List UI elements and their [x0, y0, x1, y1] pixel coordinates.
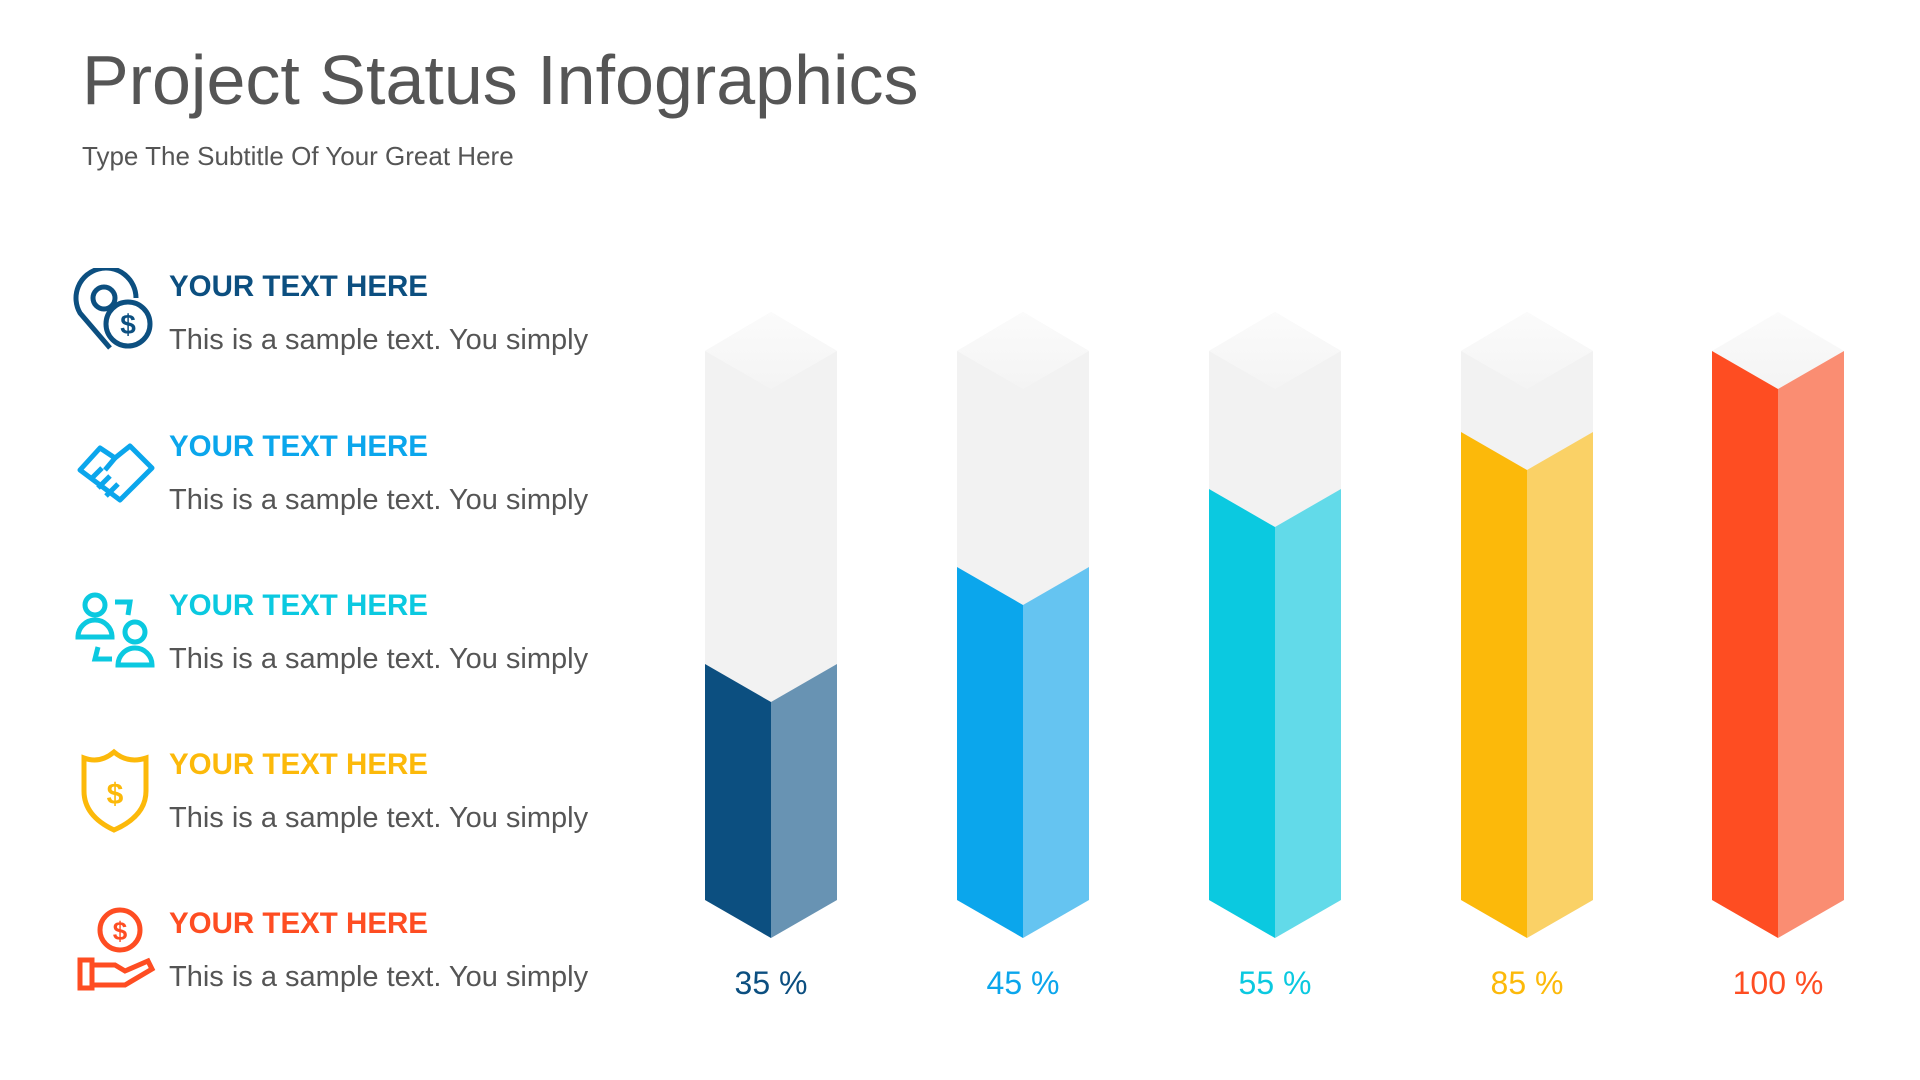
bar 100%: 100 % [1733, 965, 1823, 1001]
title: Project Status Infographics [82, 41, 919, 119]
row 5 [78, 907, 588, 993]
body text: This is a sample text. You simply [169, 643, 588, 675]
bar 45% [957, 312, 1089, 1001]
heading: YOUR TEXT HERE [169, 270, 428, 303]
body text: This is a sample text. You simply [169, 324, 588, 356]
bar 35% [705, 312, 837, 1001]
icon: hand coin [78, 908, 156, 990]
row 2 [78, 430, 588, 516]
bar 85%: 85 % [1491, 965, 1563, 1001]
bar 100% [1712, 312, 1844, 1001]
bar 55%: 55 % [1239, 965, 1311, 1001]
heading: YOUR TEXT HERE [169, 589, 428, 622]
body text: This is a sample text. You simply [169, 961, 588, 993]
icon: handshake [78, 443, 154, 503]
row 1 [74, 268, 588, 356]
bar 35%: 35 % [735, 965, 807, 1001]
heading: YOUR TEXT HERE [169, 907, 428, 940]
bar 45%: 45 % [987, 965, 1059, 1001]
icon: location dollar: $ [120, 309, 136, 340]
bar 85% [1461, 312, 1593, 1001]
row 3 [76, 589, 588, 675]
heading: YOUR TEXT HERE [169, 748, 428, 781]
icon: location dollar [74, 268, 152, 350]
icon: people exchange [76, 592, 154, 668]
body text: This is a sample text. You simply [169, 802, 588, 834]
icon: shield dollar: $ [107, 778, 124, 811]
row 4 [82, 748, 588, 834]
icon: hand coin: $ [113, 916, 128, 946]
heading: YOUR TEXT HERE [169, 430, 428, 463]
subtitle: Type The Subtitle Of Your Great Here [82, 141, 514, 171]
body text: This is a sample text. You simply [169, 484, 588, 516]
icon: shield dollar [82, 748, 148, 833]
bar 55% [1209, 312, 1341, 1001]
